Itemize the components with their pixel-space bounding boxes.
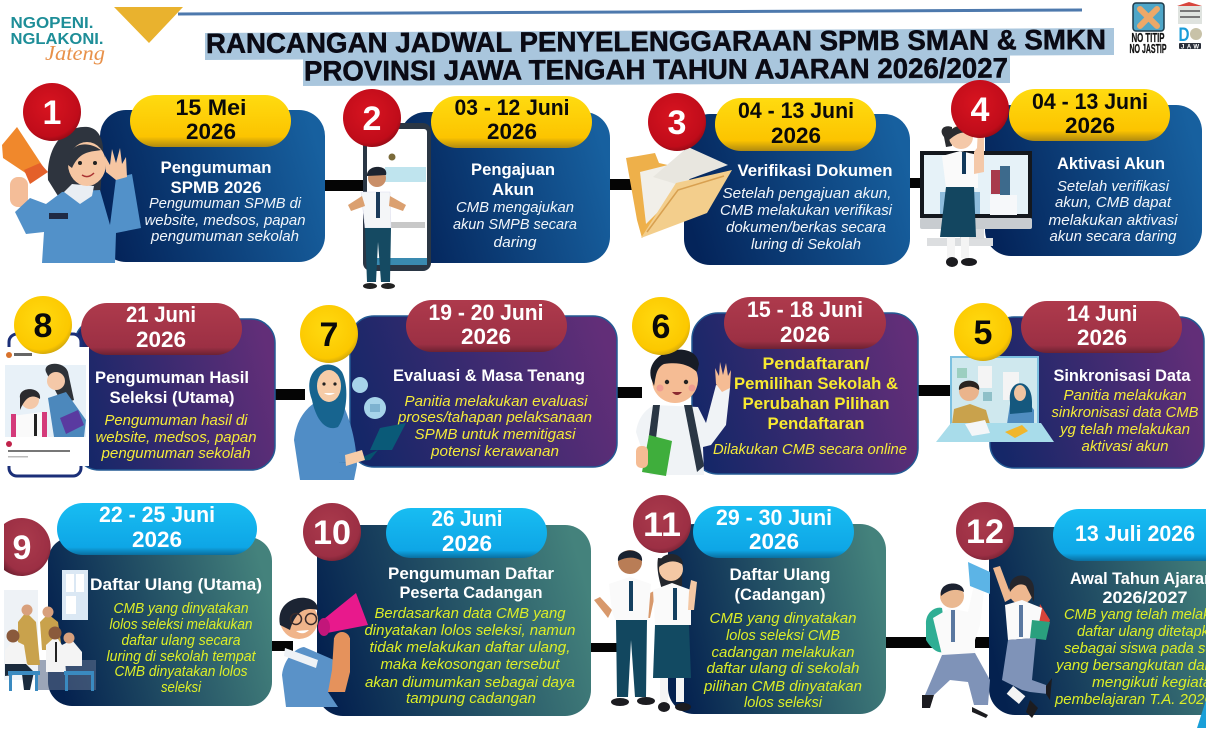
date: 15 Mei <box>176 95 246 120</box>
description <box>720 185 893 253</box>
badge: 12: 12 <box>966 513 1004 551</box>
description: luring di Sekolah <box>751 236 861 253</box>
description: Berdasarkan data CMB yang <box>374 605 566 622</box>
icon: dinas building logo: JAW <box>1181 44 1199 50</box>
description: akun secara daring <box>1050 228 1177 245</box>
description: dinyatakan lolos seleksi, namun <box>364 622 576 639</box>
heading: Akun <box>492 180 534 199</box>
badge: 7: 7 <box>320 316 338 354</box>
description: akun, CMB dapat <box>1055 194 1172 211</box>
description <box>364 605 576 707</box>
icon: two students jumping <box>922 562 1052 718</box>
description <box>106 600 256 696</box>
date pill <box>693 506 854 558</box>
description: daftar ulang secara <box>122 632 240 649</box>
heading: Pemilihan Sekolah & <box>734 374 898 393</box>
description: pengumuman sekolah <box>150 228 299 245</box>
description <box>1048 178 1178 245</box>
description: maka kekosongan tersebut <box>380 656 560 673</box>
description: akun SMPB secara <box>453 216 577 233</box>
badge: 5: 5 <box>974 314 992 352</box>
date: 2026 <box>1065 113 1115 138</box>
panel: step 4 <box>985 89 1202 256</box>
logo: Ngopeni Nglakoni Jateng: NGOPENI. <box>10 15 94 32</box>
description: Setelah verifikasi <box>1057 178 1170 195</box>
date <box>176 95 246 144</box>
icon: phone with student <box>348 123 431 289</box>
logo: Ngopeni Nglakoni Jateng: Jateng <box>45 41 105 65</box>
heading: Pengumuman <box>160 158 272 177</box>
badge: 6 <box>632 297 690 355</box>
description: CMB mengajukan <box>456 199 574 216</box>
title <box>205 24 1114 87</box>
heading <box>388 564 554 602</box>
icon: woman with megaphone <box>2 127 141 263</box>
date pill <box>1009 89 1170 141</box>
date: 2026 <box>132 527 182 552</box>
heading: Evaluasi & Masa Tenang <box>393 366 585 385</box>
heading <box>471 160 555 199</box>
badge: 2 <box>343 89 401 147</box>
date <box>126 302 196 352</box>
description: Pengumuman hasil di <box>104 412 248 429</box>
heading: SPMB 2026 <box>170 178 262 197</box>
date <box>428 300 544 349</box>
description: lolos seleksi CMB <box>726 627 840 644</box>
panel: step 3 <box>684 98 910 265</box>
description: sinkronisasi data CMB <box>1052 404 1198 421</box>
panel: step 11 <box>668 505 886 714</box>
badge: 3: 3 <box>668 104 686 142</box>
date: 26 Juni <box>432 506 502 531</box>
icon: classroom students <box>4 570 96 691</box>
badge: 4: 4 <box>971 91 990 129</box>
panel: step 8 <box>75 302 275 470</box>
description: seleksi <box>161 679 202 696</box>
badge: 12 <box>956 502 1014 560</box>
description: lolos seleksi <box>744 694 823 711</box>
panel: step 12 <box>989 509 1206 715</box>
heading: Pendaftaran <box>768 414 864 433</box>
icon: document folder <box>626 147 732 238</box>
badge: 3 <box>648 93 706 151</box>
icon: dinas building logo <box>1177 2 1202 50</box>
date pill <box>81 303 242 355</box>
icon: student waving with book <box>636 350 731 476</box>
description <box>1052 387 1198 455</box>
logo: Ngopeni Nglakoni Jateng: NGLAKONI. <box>10 31 104 48</box>
description: tidak melakukan daftar ulang, <box>370 639 570 656</box>
description <box>144 195 306 245</box>
date pill <box>1053 509 1206 561</box>
date: 2026 <box>771 123 821 148</box>
badge: 11 <box>633 495 691 553</box>
icon: yellow chevron <box>114 7 183 43</box>
icon: woman in hijab with laptop <box>294 365 406 480</box>
date pill <box>715 98 876 151</box>
description: yg telah melakukan <box>1059 421 1190 438</box>
heading: Aktivasi Akun <box>1057 154 1165 173</box>
heading: Pengumuman Hasil <box>95 368 249 387</box>
description: CMB yang dinyatakan <box>114 600 248 617</box>
date: 19 - 20 Juni <box>428 300 544 325</box>
date pill <box>724 297 886 349</box>
date <box>454 95 570 144</box>
date: 2026 <box>1077 325 1127 350</box>
description: aktivasi akun <box>1082 438 1168 455</box>
date: 04 - 13 Juni <box>738 98 854 123</box>
heading: Sinkronisasi Data <box>1054 366 1191 385</box>
icon: man with pink megaphone <box>279 593 368 707</box>
badge: 8 <box>14 296 72 354</box>
icon: dinas building logo: D <box>1178 25 1190 46</box>
icon: student with monitor <box>920 125 1032 267</box>
icon: corner arrow <box>1197 700 1206 728</box>
description: pengumuman sekolah <box>100 445 251 462</box>
description: website, medsos, papan <box>144 212 306 229</box>
description: pilihan CMB dinyatakan <box>703 678 862 695</box>
heading: (Cadangan) <box>734 585 826 604</box>
heading: 2026/2027 <box>1102 588 1188 607</box>
date: 2026 <box>461 324 511 349</box>
heading <box>160 158 272 197</box>
panel: step 10 <box>317 506 591 716</box>
description: CMB dinyatakan lolos <box>114 663 248 680</box>
description: tampung cadangan <box>406 690 536 707</box>
description: luring di sekolah tempat <box>106 648 256 665</box>
icon: social media post card <box>4 334 89 476</box>
title: RANCANGAN JADWAL PENYELENGGARAAN SPMB SMAN & SMKN <box>206 24 1106 59</box>
description <box>703 610 862 711</box>
heading: Daftar Ulang (Utama) <box>90 575 262 594</box>
date pill <box>406 300 567 352</box>
panel: step 6 <box>692 297 918 474</box>
description: akan diumumkan sebagai daya <box>365 674 575 691</box>
title: PROVINSI JAWA TENGAH TAHUN AJARAN 2026/2027 <box>304 52 1008 87</box>
description: Panitia melakukan <box>1064 387 1186 404</box>
logo: Ngopeni Nglakoni Jateng <box>10 15 105 65</box>
date <box>432 506 502 556</box>
badge: 5 <box>954 303 1012 361</box>
date <box>738 98 854 148</box>
date pill <box>57 503 257 555</box>
date: 2026 <box>749 529 799 554</box>
description: daftar ulang di sekolah <box>706 660 860 677</box>
badge: 9: 9 <box>13 529 31 567</box>
date pill <box>130 95 291 147</box>
badge: 8: 8 <box>34 307 52 345</box>
date: 13 Juli 2026 <box>1075 521 1195 546</box>
date <box>1032 89 1148 138</box>
heading: Verifikasi Dokumen <box>738 161 892 180</box>
date: 03 - 12 Juni <box>454 95 570 120</box>
badge: 10 <box>303 503 361 561</box>
date: 22 - 25 Juni <box>99 502 215 527</box>
description: melakukan aktivasi <box>1048 212 1178 229</box>
date <box>1066 301 1138 350</box>
panel: step 5 <box>990 301 1204 468</box>
icon: two officers at desk <box>936 357 1054 442</box>
badge: 10: 10 <box>313 514 351 552</box>
date pill <box>431 96 592 148</box>
heading: Pendaftaran/ <box>762 354 870 373</box>
badge: 1: 1 <box>43 94 61 132</box>
description: CMB melakukan verifikasi <box>720 202 893 219</box>
date: 2026 <box>780 322 830 347</box>
heading <box>734 354 898 433</box>
panel: step 2 <box>400 95 610 263</box>
date: 2026 <box>487 119 537 144</box>
badge: 4 <box>951 80 1009 138</box>
icon: no titip no jastip: NO TITIP <box>1132 30 1165 45</box>
heading: Pengajuan <box>471 160 555 179</box>
description <box>397 393 592 460</box>
description: cadangan melakukan <box>712 644 854 661</box>
description: Setelah pengajuan akun, <box>722 185 892 202</box>
description: SPMB untuk memitigasi <box>414 426 576 443</box>
panel: step 9 <box>48 502 272 706</box>
description: CMB yang dinyatakan <box>710 610 856 627</box>
description <box>453 199 577 251</box>
description: Pengumuman SPMB di <box>149 195 302 212</box>
badge: 2: 2 <box>363 100 381 138</box>
heading <box>1070 569 1206 607</box>
description: lolos seleksi melakukan <box>110 616 252 633</box>
date: 21 Juni <box>126 302 196 327</box>
heading: Pengumuman Daftar <box>388 564 554 583</box>
description: potensi kerawanan <box>430 443 559 460</box>
heading <box>730 565 830 604</box>
panel: step 7 <box>350 300 617 467</box>
date: 04 - 13 Juni <box>1032 89 1148 114</box>
date: 14 Juni <box>1066 301 1138 326</box>
date: 2026 <box>136 327 186 352</box>
heading: Peserta Cadangan <box>400 583 542 602</box>
date: 2026 <box>186 119 236 144</box>
icon: no titip no jastip: NO JASTIP <box>1130 41 1167 56</box>
icon: no titip no jastip <box>1130 3 1167 56</box>
heading: Seleksi (Utama) <box>110 388 234 407</box>
date pill <box>386 508 547 558</box>
description: website, medsos, papan <box>96 429 256 446</box>
heading: Daftar Ulang <box>730 565 830 584</box>
description: dokumen/berkas secara <box>726 219 886 236</box>
description: Dilakukan CMB secara online <box>713 441 907 458</box>
connector lines <box>268 178 990 652</box>
description: daring <box>494 234 537 251</box>
badge: 1 <box>23 83 81 141</box>
date <box>747 297 863 347</box>
date: 29 - 30 Juni <box>716 505 832 530</box>
badge: 7 <box>300 305 358 363</box>
heading: Perubahan Pilihan <box>742 394 890 413</box>
date <box>99 502 215 552</box>
icon: two students standing <box>594 550 697 712</box>
description <box>96 412 256 462</box>
heading <box>95 368 249 407</box>
badge: 6: 6 <box>652 308 670 346</box>
panel: step 1 <box>100 95 325 262</box>
description <box>1054 606 1206 708</box>
badge: 11: 11 <box>643 506 681 544</box>
date pill <box>1021 301 1182 353</box>
description: Panitia melakukan evaluasi <box>404 393 588 410</box>
date: 2026 <box>442 531 492 556</box>
description: proses/tahapan pelaksanaan <box>397 409 592 426</box>
badge: 9 <box>4 518 51 576</box>
date: 15 - 18 Juni <box>747 297 863 322</box>
date <box>716 505 832 554</box>
